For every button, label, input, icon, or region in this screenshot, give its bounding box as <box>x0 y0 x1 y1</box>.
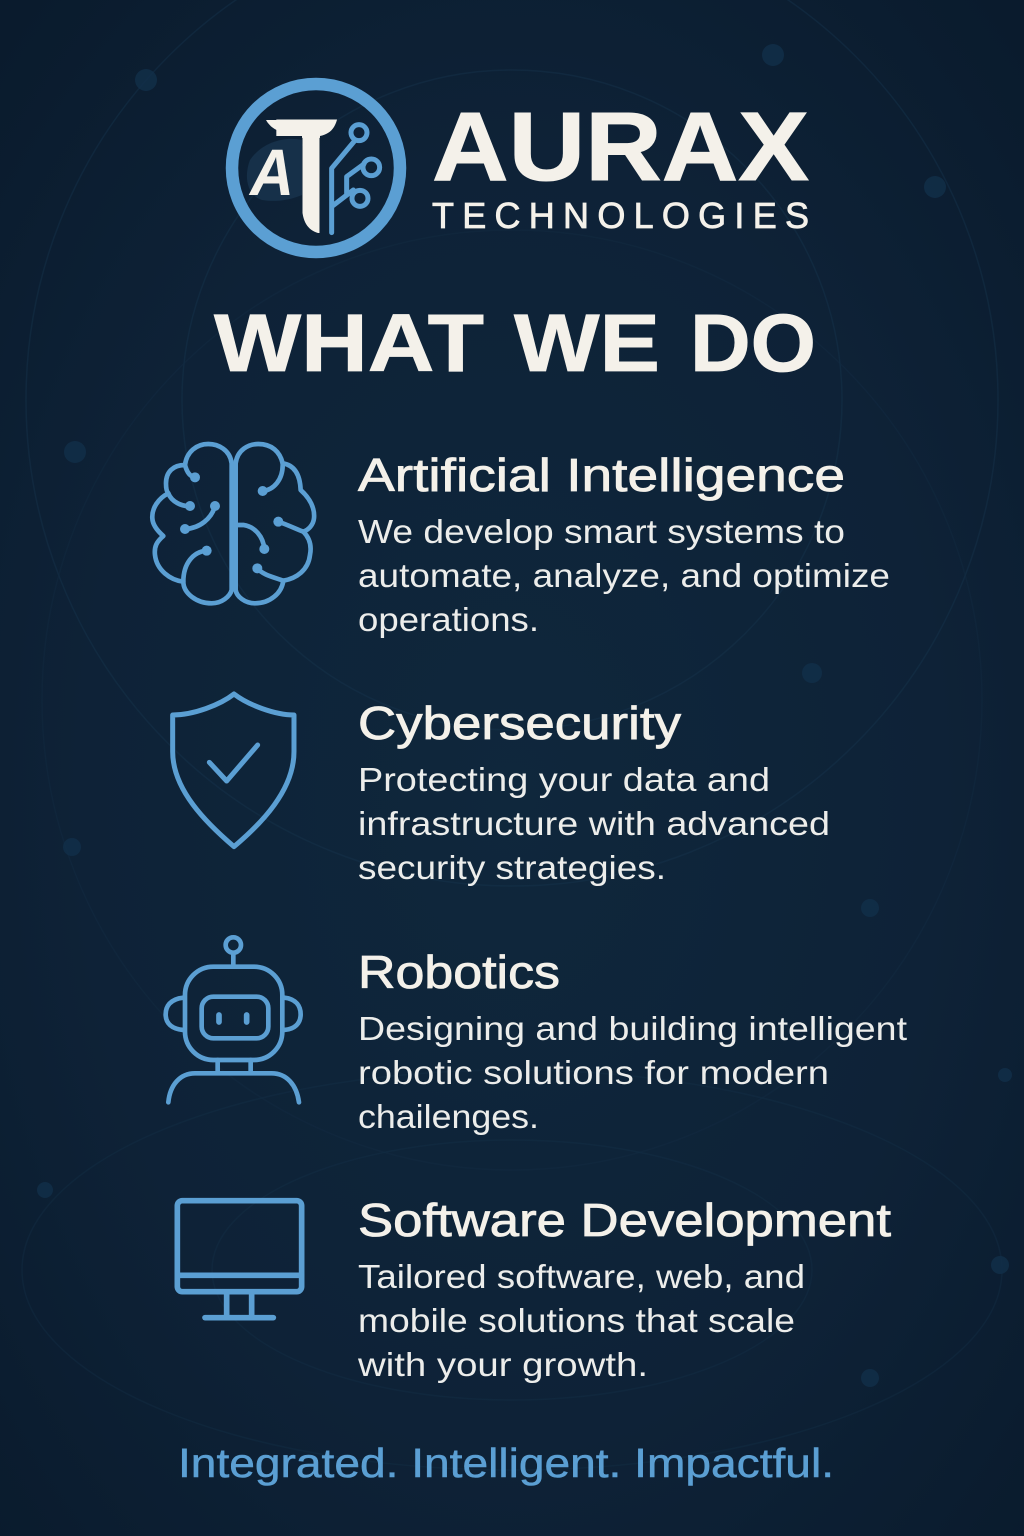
icon: brain <box>152 444 314 603</box>
description: chailenges. <box>358 1099 539 1136</box>
description <box>358 1011 908 1136</box>
description: mobile solutions that scale <box>358 1303 795 1340</box>
brand name <box>432 92 809 236</box>
service: software development <box>177 1194 891 1384</box>
logo mark <box>232 84 400 268</box>
service: cybersecurity <box>173 694 830 887</box>
brand name: AURAX <box>432 92 809 201</box>
title: WE <box>514 298 660 389</box>
description: security strategies. <box>358 850 666 887</box>
icon: robot <box>166 937 301 1102</box>
description: We develop smart systems to <box>358 514 845 551</box>
title: WHAT <box>214 298 484 389</box>
description: Protecting your data and <box>358 762 770 799</box>
description <box>358 762 830 887</box>
description: infrastructure with advanced <box>358 806 830 843</box>
icon: monitor <box>177 1201 302 1318</box>
description: automate, analyze, and optimize <box>358 558 890 595</box>
description: operations. <box>358 602 539 639</box>
brand name: TECHNOLOGIES <box>432 195 809 236</box>
title: DO <box>690 298 816 389</box>
description <box>357 1259 805 1384</box>
logo mark: T <box>275 84 347 268</box>
service: artificial intelligence <box>152 444 890 639</box>
heading: Robotics <box>358 946 560 998</box>
heading: Software Development <box>358 1194 891 1246</box>
description: Tailored software, web, and <box>358 1259 805 1296</box>
description: Designing and building intelligent <box>358 1011 908 1048</box>
description <box>358 514 890 639</box>
heading: Cybersecurity <box>358 697 681 749</box>
tagline: Integrated. Intelligent. Impactful. <box>178 1440 834 1486</box>
icon: shield <box>173 694 294 847</box>
logo mark: A <box>248 135 294 209</box>
description: with your growth. <box>357 1347 648 1384</box>
heading: Artificial Intelligence <box>358 449 845 501</box>
title <box>214 298 816 389</box>
service: robotics <box>166 937 908 1136</box>
description: robotic solutions for modern <box>358 1055 829 1092</box>
